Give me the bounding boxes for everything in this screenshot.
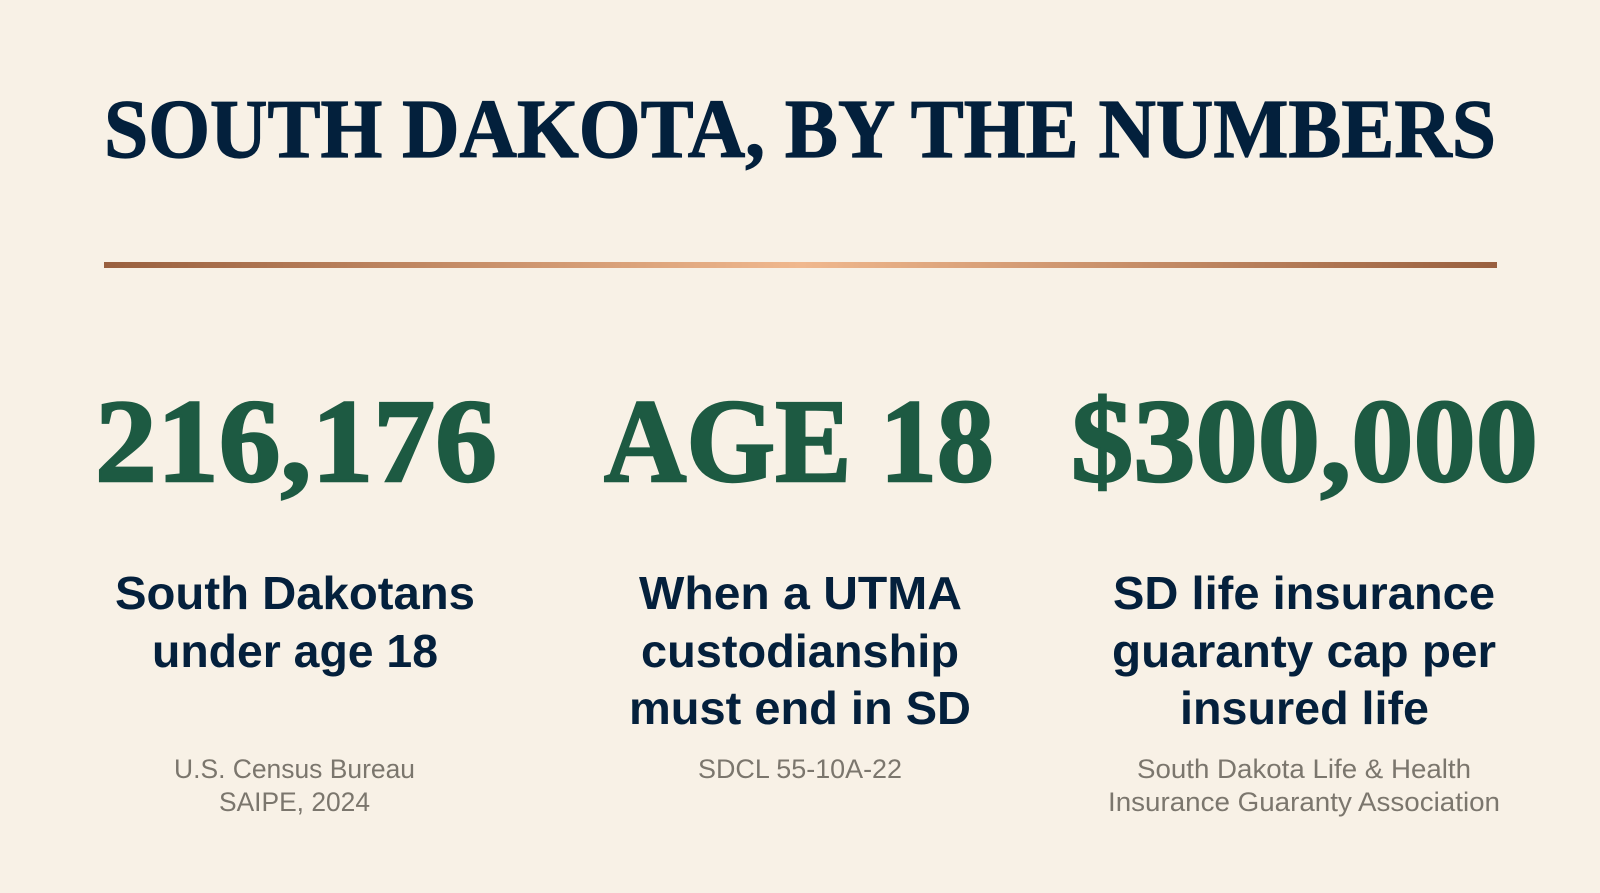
label: When a UTMA custodianship must end in SD: must end in SD bbox=[629, 682, 971, 734]
source: guaranty association: Insurance Guaranty Association bbox=[1108, 787, 1500, 817]
label: When a UTMA custodianship must end in SD: custodianship bbox=[641, 625, 959, 677]
big number: AGE 18: AGE 18 bbox=[604, 375, 994, 507]
label: South Dakotans under age 18 bbox=[115, 567, 475, 677]
copper divider rule bbox=[104, 262, 1497, 268]
label: When a UTMA custodianship must end in SD bbox=[629, 567, 971, 734]
title: SOUTH DAKOTA, BY THE NUMBERS bbox=[104, 83, 1496, 176]
source: guaranty association: South Dakota Life & Health bbox=[1137, 754, 1471, 784]
column: South Dakotans under 18 bbox=[95, 375, 497, 817]
source: SDCL: SDCL 55-10A-22 bbox=[698, 754, 902, 784]
source: Census: U.S. Census Bureau bbox=[174, 754, 415, 784]
label: SD life insurance guaranty cap per insured life: guaranty cap per bbox=[1112, 625, 1496, 677]
label: South Dakotans under age 18: under age 18 bbox=[152, 625, 438, 677]
label: SD life insurance guaranty cap per insured life: insured life bbox=[1180, 682, 1429, 734]
label: When a UTMA custodianship must end in SD: When a UTMA bbox=[639, 567, 962, 619]
source: Census: SAIPE, 2024 bbox=[219, 787, 370, 817]
source: guaranty association bbox=[1108, 754, 1500, 817]
big number: $300,000: $300,000 bbox=[1071, 375, 1538, 507]
label: SD life insurance guaranty cap per insured life: SD life insurance bbox=[1113, 567, 1495, 619]
column: life insurance guaranty cap bbox=[1071, 375, 1538, 817]
label: South Dakotans under age 18: South Dakotans bbox=[115, 567, 475, 619]
big number: 216,176: 216,176 bbox=[95, 375, 497, 507]
label: SD life insurance guaranty cap per insured life bbox=[1112, 567, 1496, 734]
source: Census bbox=[174, 754, 415, 817]
column: UTMA age bbox=[604, 375, 994, 784]
